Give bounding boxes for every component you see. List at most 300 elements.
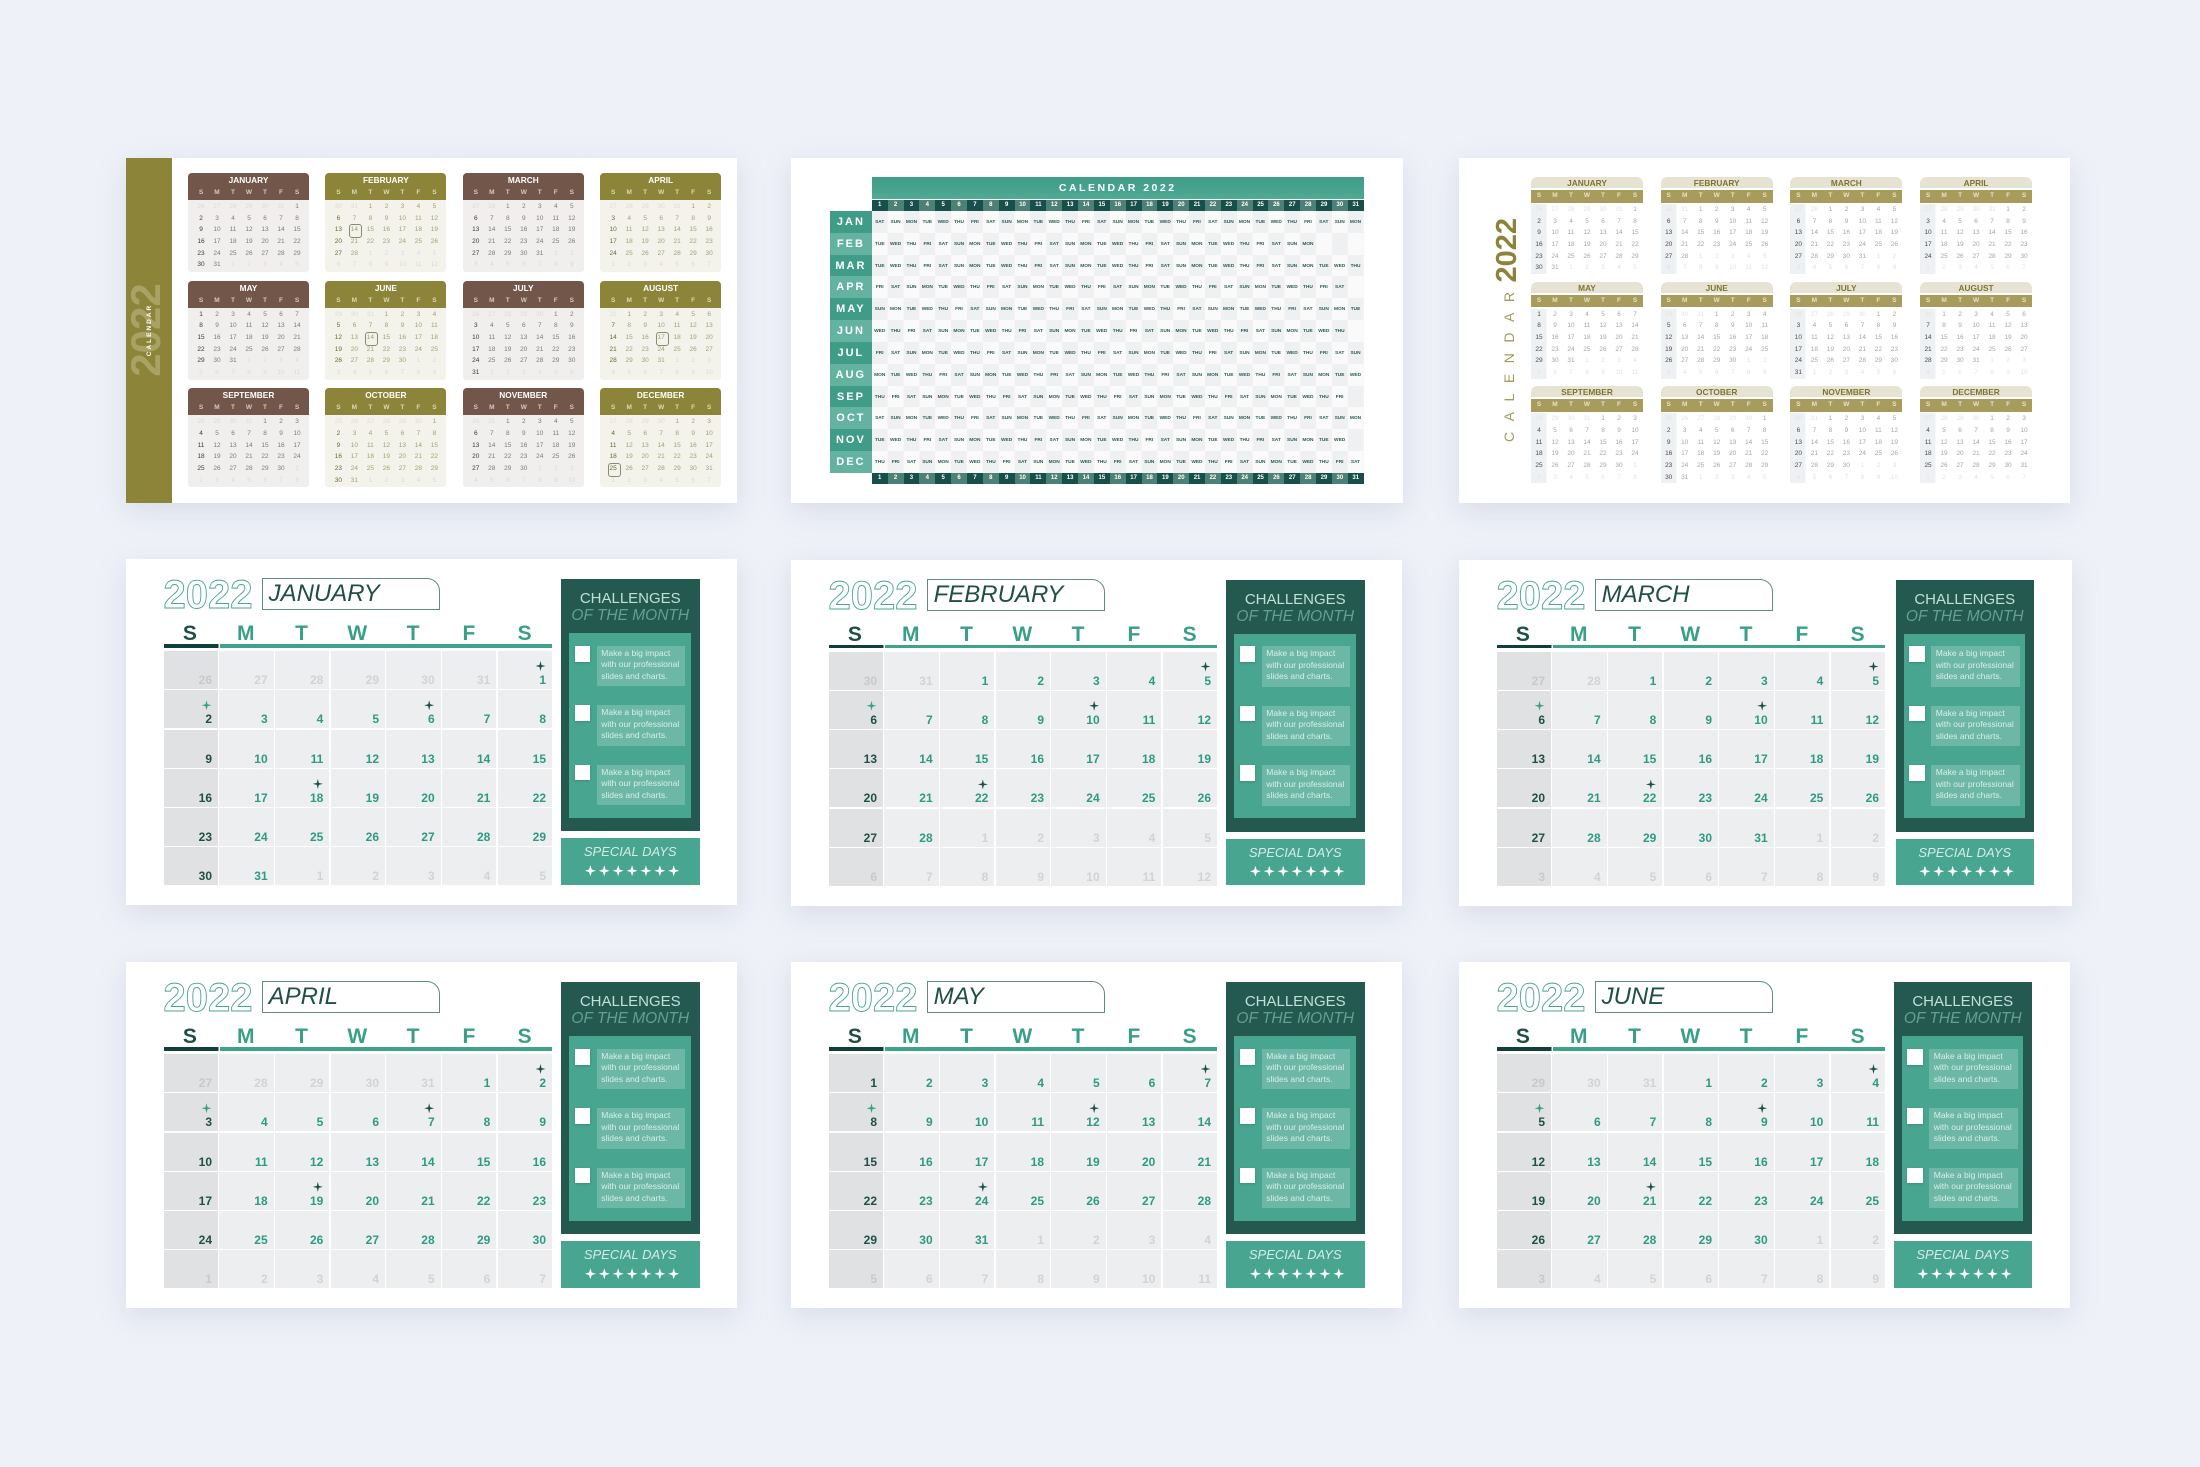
month card: December: 9 [2006,427,2010,434]
month card: October: 2 [1715,474,1718,481]
month rows with weekdays: WED [1286,285,1298,290]
challenges panel: CHALLENGES [1245,993,1346,1010]
month card: June: T [1699,297,1703,304]
month rows with weekdays: TUE [1034,416,1043,421]
month card: April: 7 [1990,218,1994,225]
month card: July: 9 [1893,322,1896,329]
month rows with weekdays: MON [1144,351,1155,356]
month card: July: 24 [472,357,479,364]
month card: June: T [368,297,372,304]
top day numbers: 29 [1321,202,1327,208]
month card: November: 19 [1891,439,1898,446]
month rows with weekdays: SUN [1176,242,1186,247]
month card: July: 3 [474,322,478,329]
month card: October: 16 [335,453,342,460]
month rows with weekdays: SUN [1208,307,1218,312]
date grid: 7 [1761,1272,1768,1286]
month card: November: 13 [472,442,479,449]
month rows with weekdays: SUN [954,438,964,443]
date grid: 14 [477,752,490,766]
month card: August: 10 [1972,322,1980,329]
bottom day numbers: 24 [1241,475,1248,481]
month rows with weekdays: FRI [908,329,915,334]
month card: November: S [474,404,478,411]
month card: February: S [1667,192,1671,199]
month card: May: S [199,297,203,304]
month card: October: F [416,404,420,411]
panel: year overview brown and olive [126,158,737,503]
checklist: slides and charts. [1936,790,2002,800]
month card: July: 30 [568,357,575,364]
month card: April: 13 [658,226,665,233]
month rows with weekdays: WED [890,264,901,269]
month card: September: 2 [279,418,283,425]
month rows with weekdays: FRI [1082,416,1090,421]
month card: July [463,281,584,380]
month card: June: 28 [1697,357,1704,364]
month card: July: T [1860,297,1864,304]
month card: June: 28 [367,357,374,364]
date grid: 7 [1594,713,1601,727]
bottom day numbers: 2 [894,475,897,481]
date grid: 3 [1538,870,1545,884]
month card: October: 18 [1697,450,1704,457]
month card: July: 17 [472,346,479,353]
date grid: 15 [975,752,988,766]
date grid: 20 [864,791,877,805]
weekday header: W [347,622,367,645]
month card: November: S [1796,401,1801,408]
month card: September: 8 [1633,474,1637,481]
month card: October: 18 [367,453,374,460]
month card: March: 5 [506,261,510,268]
month card: August: 6 [707,311,711,318]
month card: April: 2 [707,203,711,210]
date grid: 5 [870,1272,877,1286]
date grid: 2 [205,712,212,726]
month card: January: 5 [247,215,251,222]
month card: September: 7 [1617,474,1621,481]
month card: December: 26 [1940,462,1948,469]
month rows with weekdays: FRI [1145,264,1153,269]
month rows with weekdays: MON [1255,285,1266,290]
month card: November: 7 [1845,474,1848,481]
month card: May: 6 [279,311,283,318]
month card: June: 24 [415,346,422,353]
month card: March: 26 [568,238,575,245]
month card: July: 28 [1859,357,1866,364]
month card: September: 26 [213,465,221,472]
month name box: MARCH [1602,581,1690,608]
month card: March: 27 [1795,253,1802,260]
month card: September: 9 [279,430,283,437]
month rows with weekdays: MON [985,373,996,378]
weekday header: T [960,1025,973,1048]
month card: August: T [675,297,679,304]
month rows with weekdays: TUE [1287,460,1297,465]
checklist: Make a big impact [1934,1170,2003,1180]
month rows with weekdays: SUN [1224,220,1234,225]
month card: November: 27 [1795,462,1802,469]
month card: July: 27 [520,357,527,364]
month card: October: 4 [417,477,420,484]
challenges panel [561,982,700,1234]
date grid: 3 [1761,674,1768,688]
month card: September: 6 [1569,427,1573,434]
month card: December: 30 [2004,462,2012,469]
month card: October: 3 [353,430,356,437]
month card: September: 7 [279,477,283,484]
month card: February: F [416,189,420,196]
month rows with weekdays: SUN [875,307,885,312]
month name box [927,579,1105,611]
month card: April: 16 [706,226,713,233]
checklist: Make a big impact [601,767,670,777]
top day numbers: 4 [926,202,929,208]
top day numbers: 11 [1035,202,1042,208]
month card: December: 5 [1942,427,1946,434]
month card: April: 21 [1988,241,1996,248]
month rows with weekdays: FRI [1193,220,1201,225]
date grid: 2 [261,1272,268,1286]
month card: July: 3 [1845,369,1848,376]
month card: August: 6 [1958,369,1962,376]
month card: August: 17 [658,334,665,341]
date grid: 3 [1093,831,1100,845]
month card: February: 23 [383,238,390,245]
month card: May: 2 [215,311,219,318]
month card: January: 1 [1633,206,1637,213]
date grid: 12 [1532,1155,1545,1169]
date grid: 6 [926,1272,933,1286]
month card: July: 3 [522,369,526,376]
date grid: 28 [1587,831,1601,845]
date grid: 15 [477,1155,490,1169]
month card: April: 24 [610,250,617,257]
month card: June: 27 [351,357,358,364]
month card: April: F [691,189,695,196]
date grid: 28 [919,831,933,845]
bottom day numbers [872,473,1364,484]
month rows with weekdays: WED [1334,264,1345,269]
month rows with weekdays: THU [1224,329,1234,334]
month card: February [325,173,446,272]
month card: September: 19 [213,453,221,460]
month card: November: 4 [474,477,478,484]
date grid: 1 [870,1076,877,1090]
month card: October: 25 [367,465,374,472]
month card: February: T [368,189,372,196]
month card: July: 2 [506,369,510,376]
month card: July: 2 [570,311,574,318]
month card: August: 4 [1926,369,1930,376]
month card: March: S [570,189,574,196]
month card: May: 5 [199,369,203,376]
month card: September: 17 [293,442,301,449]
month card: January: 5 [295,261,299,268]
month card: March: 22 [504,238,511,245]
month card: April [600,173,721,272]
month card: March: M [1812,192,1817,199]
date grid: 8 [870,1115,877,1129]
month card: March: W [521,189,527,196]
month card: April: 17 [610,238,617,245]
month card: January: T [1569,192,1573,199]
checklist: Make a big impact [601,1170,670,1180]
month card: April: 3 [611,215,615,222]
month rows with weekdays: MON [1080,242,1092,247]
date grid: 5 [1093,1076,1100,1090]
month card: July: 7 [1861,322,1864,329]
month card: January: 21 [277,238,285,245]
month rows with weekdays: TUE [1176,395,1186,400]
month card: June: 3 [1747,311,1750,318]
bottom day numbers: 27 [1289,475,1296,481]
month card: December: 17 [706,442,713,449]
month rows with weekdays: WED [938,416,949,421]
month card: July: 20 [1843,346,1850,353]
date grid [829,1054,1217,1288]
weekday header: S [183,1025,197,1048]
month rows with weekdays: SAT [939,242,948,247]
month rows with weekdays: MON [906,416,917,421]
month card: June: 9 [1731,322,1734,329]
month card: January: 7 [1617,218,1621,225]
month name box: JUNE [1602,983,1664,1010]
month card: December: T [643,404,647,411]
month card: October: 14 [415,442,422,449]
month rows with weekdays: SAT [1224,285,1233,290]
month card: February: 24 [399,238,406,245]
month rows with weekdays: TUE [1097,264,1107,269]
month card: November: 11 [1875,427,1882,434]
month rows with weekdays: WED [1175,285,1187,290]
month card: November: 19 [568,442,575,449]
date grid: 1 [539,673,546,687]
checklist: slides and charts. [1266,790,1332,800]
checklist: with our professional [1266,1062,1344,1072]
month card: February [1661,177,1773,274]
date grid: 30 [864,674,877,688]
panel: April page [126,962,737,1308]
month card: December: 4 [611,430,615,437]
month rows with weekdays: MON [1096,373,1107,378]
month rows with weekdays: FRI [1304,416,1312,421]
month card: May: S [1537,297,1541,304]
month card: July: 18 [488,346,495,353]
month rows with weekdays: FRI [1336,460,1344,465]
month card: August: T [1990,297,1994,304]
month card: May: 16 [1551,334,1559,341]
bottom day numbers: 7 [973,475,977,481]
date grid: 20 [1532,791,1545,805]
month card: July: 11 [1811,334,1818,341]
month card: August: 21 [1924,346,1932,353]
month card: February: 1 [1699,206,1702,213]
month card: September: 3 [215,477,219,484]
month card: July: 5 [554,369,558,376]
month card: November: NOVEMBER [499,390,547,400]
month card: December: 3 [2022,415,2026,422]
month card: February: 13 [335,226,342,233]
month rows with weekdays: FRI [923,242,931,247]
month card: November: 10 [1859,427,1866,434]
month rows with weekdays: SAT [1081,307,1091,312]
month card: February: 31 [1681,206,1688,213]
month card: September: 11 [1536,439,1542,446]
weekday header: S [848,622,862,646]
month rows with weekdays: TUE [1160,285,1170,290]
month rows with weekdays: WED [1112,264,1123,269]
date grid: 3 [1538,1272,1545,1286]
month card: April: 9 [2022,218,2026,225]
month card: September: 7 [1585,427,1589,434]
month rows with weekdays: SAT [1065,373,1075,378]
checklist: Make a big impact [601,648,670,658]
month rows with weekdays: SAT [1319,220,1328,225]
month rows with weekdays: TUE [875,264,885,269]
month card: March: 9 [522,215,526,222]
month name box: JANUARY [269,580,380,607]
month rows with weekdays: THU [1113,329,1123,334]
month card: November: 6 [474,430,478,437]
date grid: 26 [1086,1194,1100,1208]
weekday header: W [1012,622,1032,646]
month card: October: 28 [1745,462,1752,469]
month card: May: 9 [1601,369,1605,376]
month card: April: S [1926,192,1930,199]
bottom day numbers: 3 [910,475,913,481]
twelve month card grid [188,173,721,487]
month rows with weekdays: MON [922,285,933,290]
month card: January: 3 [263,261,267,268]
bottom day numbers: 8 [989,475,992,481]
month card: April: 4 [1974,264,1978,271]
month card: September: 22 [261,453,269,460]
month card: June: 29 [1665,311,1672,318]
date grid: 9 [205,752,212,766]
month rows with weekdays: SAT [923,329,932,334]
date grid: 4 [1149,674,1155,688]
month rows with weekdays: FRI [1256,242,1264,247]
month rows with weekdays: SUN [1144,460,1154,465]
month card: July: W [1843,297,1849,304]
month rows with weekdays: SUN [1239,351,1250,356]
month card: June: F [416,297,420,304]
month card: May: 31 [1567,357,1575,364]
weekday header [848,1025,1197,1048]
month card: November: 2 [1845,415,1848,422]
month rows with weekdays: SUN [906,285,917,290]
month card: January: 31 [277,203,285,210]
month card: December: S [2022,401,2026,408]
month card: February: 19 [1761,229,1768,236]
month card: April: 27 [658,250,665,257]
challenges panel: OF THE MONTH [1906,608,2024,624]
month card: January: 24 [213,250,221,257]
month card: October: 1 [1699,474,1702,481]
checklist: slides and charts. [1934,1074,2000,1084]
month rows with weekdays: TUE [922,416,932,421]
month card: January: 27 [261,250,269,257]
month card: March: 2 [570,250,574,257]
month card: April: 8 [691,215,695,222]
month card: April: 4 [627,215,631,222]
date grid: 16 [1031,752,1044,766]
month rows with weekdays: FRI [1241,329,1248,334]
weekday header: F [462,1025,475,1048]
date grid: 23 [1754,1194,1768,1208]
month card: January: 9 [1537,229,1541,236]
month card: February: 7 [353,215,356,222]
month rows with weekdays: THU [1081,351,1091,356]
month card: April: 12 [1956,229,1964,236]
month card: May: M [1552,297,1558,304]
month card: December: 5 [675,477,679,484]
month card: May: 7 [295,311,299,318]
date grid: 18 [1810,752,1823,766]
month card: June: 19 [1665,346,1672,353]
month card: April: 19 [642,238,649,245]
month card: October: 19 [383,453,390,460]
month rows with weekdays: SUN [1065,438,1075,443]
month card: October: M [1682,401,1687,408]
month card: July: 4 [490,322,494,329]
date grid: 28 [1643,1233,1656,1247]
month rows with weekdays: MON [969,438,980,443]
date grid: 19 [1866,752,1879,766]
month card: August: 2 [643,311,647,318]
month rows with weekdays: THU [907,242,916,247]
month card: May: 11 [294,369,300,376]
month card: December: 5 [627,430,631,437]
month card: August: 8 [1990,369,1994,376]
month card: December: W [658,404,664,411]
month card: October: 29 [399,418,406,425]
month card: February: 22 [367,238,374,245]
month rows with weekdays: WED [1128,373,1139,378]
checklist: slides and charts. [1266,1193,1332,1203]
month card: November: 8 [1861,474,1864,481]
month rows with weekdays: SUN [1176,438,1186,443]
month card: March: 6 [522,261,526,268]
month card: July: 29 [1875,357,1882,364]
month card: August: 19 [2004,334,2012,341]
month rows with weekdays: WED [1318,329,1329,334]
checklist: with our professional [1934,1062,2012,1072]
month card: May: 12 [1599,322,1607,329]
month card: November: 22 [1827,450,1834,457]
month rows with weekdays: THU [1097,460,1107,465]
month card: August: AUGUST [1959,283,1994,293]
month card: September: 3 [1553,474,1557,481]
month card: September: 29 [261,465,269,472]
month rows with weekdays: SUN [906,351,917,356]
month card: May: 26 [1599,346,1607,353]
bottom day numbers: 5 [942,475,945,481]
month card: June: 30 [399,357,406,364]
date grid: 5 [1204,674,1211,688]
month card: July: 19 [504,346,511,353]
month card: February: 4 [1747,206,1750,213]
month rows with weekdays: FRI [876,285,884,290]
month card: March: 6 [474,215,478,222]
month card: December: 28 [658,465,665,472]
month rows with weekdays: THU [1129,264,1138,269]
month card: February: 31 [351,203,358,210]
month card: May [1531,282,1643,379]
month card: February: 7 [1683,218,1686,225]
